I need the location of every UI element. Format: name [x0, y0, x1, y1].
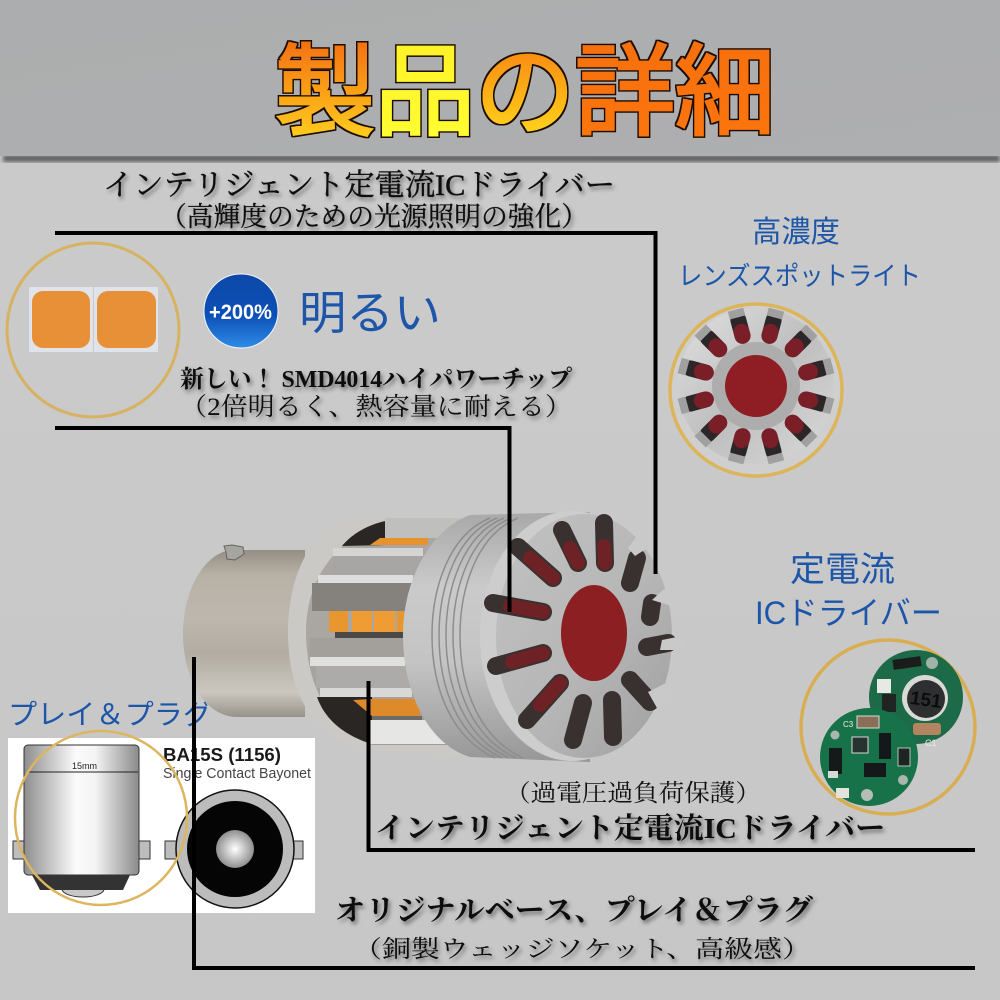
title: 詳	[575, 37, 675, 149]
title: 品	[375, 37, 475, 149]
bulb	[183, 511, 682, 762]
base diagram: side view: 15mm	[72, 761, 97, 771]
title	[275, 37, 775, 149]
base diagram: end view	[165, 790, 303, 908]
leader line: cage to driver text	[368, 681, 975, 850]
PCB top	[869, 650, 963, 748]
driver heading	[755, 551, 942, 631]
callout text: SMD4014: 新しい！ SMD4014ハイパワーチップ	[180, 366, 572, 393]
spotlight heading: レンズスポットライト	[678, 261, 921, 291]
lens spotlight circle	[670, 304, 842, 476]
spotlight heading: 高濃度	[752, 216, 840, 249]
PCB top: C1	[925, 738, 937, 748]
PCB bottom	[820, 708, 918, 806]
leader line: LED chip to face slot	[55, 428, 510, 612]
base diagram: side view	[13, 745, 150, 897]
header band	[0, 0, 1000, 162]
SMD chip circle	[7, 243, 179, 417]
outer fin notches	[628, 532, 682, 708]
callout heading: intelligent driver: （高輝度のための光源照明の強化）	[160, 202, 588, 232]
base type label: Single Contact Bayonet	[163, 766, 311, 782]
PCB bottom: C3	[843, 720, 854, 729]
badge: +200%	[204, 274, 278, 348]
callout text: original base	[335, 894, 813, 963]
base type label: BA15S (1156)	[163, 745, 281, 765]
leader line: base to plug text	[194, 657, 975, 968]
callout text: overvoltage protection: （過電圧過負荷保護）	[505, 780, 761, 807]
driver heading: 定電流	[790, 551, 895, 589]
base type label	[163, 745, 311, 782]
plug panel	[8, 731, 315, 913]
driver heading: ICドライバー	[755, 595, 942, 631]
callout text: original base: （銅製ウェッジソケット、高級感）	[353, 936, 811, 963]
wheel slots	[678, 308, 834, 464]
callout text: SMD4014	[180, 366, 572, 421]
spotlight heading	[678, 216, 921, 291]
orange LEDs	[329, 538, 428, 716]
callout text: SMD4014: （2倍明るく、熱容量に耐える）	[180, 393, 572, 421]
callout text: driver: インテリジェント定電流ICドライバー	[375, 812, 885, 845]
metal base	[183, 545, 305, 717]
finned face	[480, 511, 682, 761]
callout heading: intelligent driver	[103, 169, 615, 232]
callout heading: intelligent driver: インテリジェント定電流ICドライバー	[103, 169, 615, 202]
driver PCB circle	[801, 640, 975, 814]
badge: +200%: +200%	[209, 301, 272, 324]
title: の	[475, 37, 575, 149]
plug and play label: プレイ＆プラグ	[8, 699, 212, 730]
callout text: original base: オリジナルベース、プレイ＆プラグ	[335, 894, 813, 927]
collar and cage	[288, 517, 480, 757]
PCB top: 151	[909, 688, 943, 713]
title: 製	[275, 37, 375, 149]
title: 細	[675, 37, 775, 149]
brightness label: 明るい	[299, 287, 441, 339]
leader line: top driver to face	[55, 233, 656, 574]
head cylinder	[403, 512, 590, 762]
